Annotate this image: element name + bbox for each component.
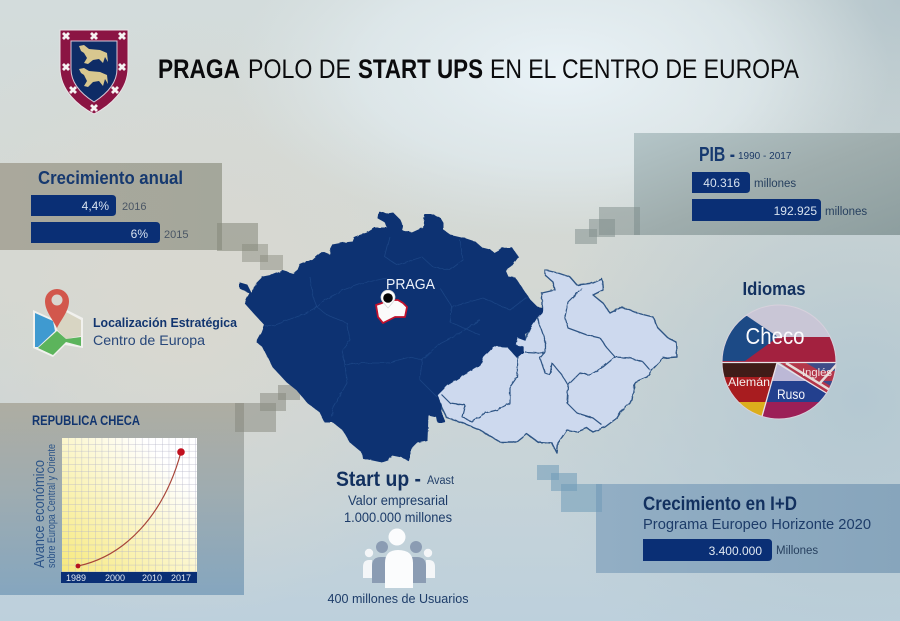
title: PRAGA: [158, 54, 240, 84]
panel: localizacion estrategica: Localización Estratégica: [93, 315, 238, 330]
start up block: 400 millones de Usuarios: [328, 591, 469, 606]
panel: localizacion estrategica: [33, 289, 238, 357]
panel: republica checa: [0, 385, 300, 595]
bar 2016: [31, 195, 146, 216]
bar 3.400.000: Millones: [776, 545, 818, 557]
axis labels: Avance económico: [31, 460, 48, 568]
slice: checo: [720, 304, 840, 362]
map marker: praga: PRAGA: [386, 276, 435, 293]
decorative squares top left: [217, 223, 283, 270]
start up block: Avast: [427, 475, 455, 487]
panel: republica checa: sobre Europa Central y Oriente: [46, 444, 58, 568]
bar 2016: 2016: [122, 201, 146, 213]
slice: ruso: [762, 364, 826, 418]
panel: crecimiento anual: [0, 163, 283, 270]
heading: Crecimiento anual: [38, 168, 183, 188]
idiomas pie: Idiomas: [742, 279, 806, 299]
start up block: Start up -: [336, 468, 421, 491]
wolf upper: [79, 45, 108, 64]
map marker: praga: [376, 276, 435, 323]
bar 2015: [31, 222, 188, 243]
title: [158, 54, 799, 84]
idiomas pie: Alemán: [728, 375, 770, 389]
decorative squares bottom right: [537, 465, 602, 512]
idiomas pie: Inglés: [802, 367, 833, 379]
heading: REPUBLICA CHECA: [32, 413, 140, 428]
bar 40.316: 40.316: [703, 176, 740, 190]
crest shield: [60, 30, 128, 114]
decorative squares left: [235, 385, 300, 432]
decorative squares top right: [575, 207, 640, 244]
line chart: 1989: [66, 573, 86, 583]
bar 192.925: millones: [825, 206, 867, 218]
start up block: Valor empresarial: [348, 493, 448, 508]
bar 40.316: millones: [754, 178, 796, 190]
slice: aleman: [722, 363, 776, 416]
pin icon: [381, 290, 395, 308]
panel: localizacion estrategica: Centro de Europa: [93, 332, 205, 348]
slice: ingles: [780, 363, 836, 392]
line chart: 2010: [142, 573, 162, 583]
title: POLO DE: [248, 54, 351, 84]
icon: users: [363, 528, 435, 588]
idiomas pie: [720, 279, 840, 420]
panel: PIB: [575, 133, 900, 244]
panel: crecimiento en I+D: [537, 465, 900, 573]
bar 40.316: [692, 172, 796, 193]
bar 2015: 6%: [131, 227, 148, 241]
heading: PIB -: [699, 144, 735, 166]
idiomas pie: Checo: [746, 323, 804, 349]
title: START UPS: [358, 54, 483, 84]
line chart: 2000: [105, 573, 125, 583]
line chart: 2017: [171, 573, 191, 583]
heading: Crecimiento en I+D: [643, 494, 797, 515]
bar 192.925: [692, 199, 867, 221]
bar 3.400.000: 3.400.000: [709, 544, 762, 558]
bar 2015: 2015: [164, 229, 188, 241]
icon: map pin: [33, 289, 83, 357]
start up block: 1.000.000 millones: [344, 510, 452, 525]
map: bohemia regions: [240, 212, 542, 462]
title: EN EL CENTRO DE EUROPA: [490, 54, 799, 84]
white crosses: [63, 33, 125, 111]
panel: PIB: 1990 - 2017: [738, 151, 792, 162]
line chart: [61, 438, 197, 583]
map: moravia regions: [437, 270, 677, 453]
wolf lower: [79, 68, 108, 87]
bar 2016: 4,4%: [82, 199, 109, 213]
panel: crecimiento en I+D: Programa Europeo Horizonte 2020: [643, 517, 871, 533]
idiomas pie: Ruso: [777, 386, 805, 402]
bar 3.400.000: [643, 539, 818, 561]
start up block: [328, 468, 469, 606]
bar 192.925: 192.925: [774, 204, 817, 218]
